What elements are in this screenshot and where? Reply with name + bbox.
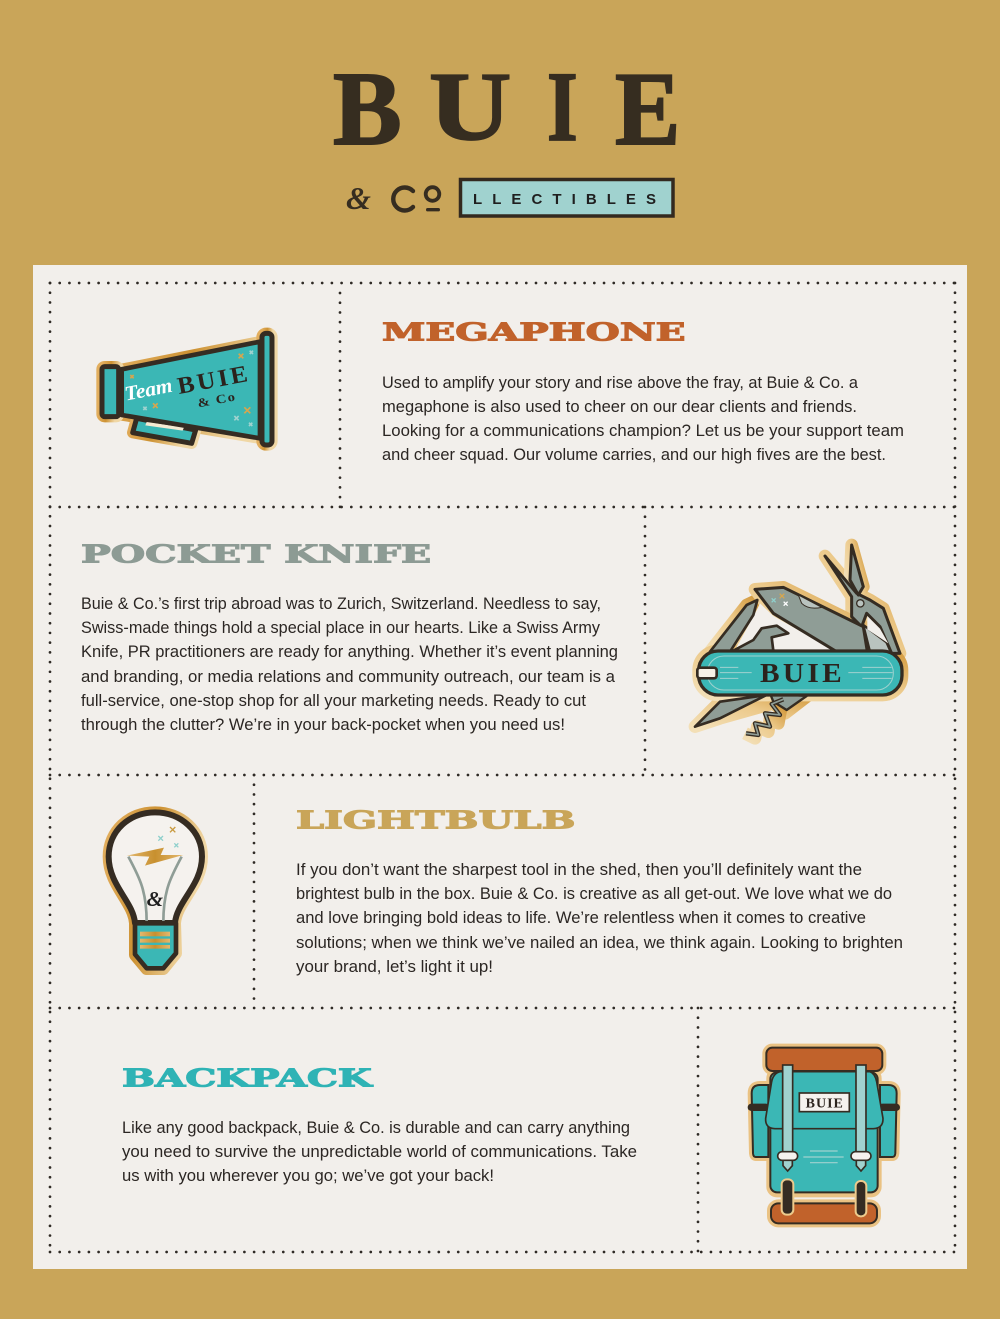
- text: pocket knife: Swiss-made things hold a special place in our hearts. Like a Swiss Army: [81, 618, 601, 637]
- megaphone text: BUIE: [175, 361, 252, 400]
- megaphone text: & Co: [196, 389, 237, 410]
- megaphone text: Team: [122, 373, 174, 405]
- icon: backpack: [748, 1048, 900, 1223]
- text: backpack: you need to survive the unpredictable world of communications. Take: [122, 1142, 637, 1161]
- text: lightbulb: your brand, let’s light it up!: [296, 957, 493, 976]
- megaphone sparkles: [130, 351, 253, 426]
- section: megaphone: [102, 318, 904, 464]
- logo: & Co: [346, 180, 440, 216]
- section: backpack: [122, 1048, 900, 1223]
- text: megaphone: Used to amplify your story and rise above the fray, at Buie & Co. a: [382, 373, 859, 392]
- logo: & Co: &: [346, 180, 371, 216]
- text: pocket knife: [81, 594, 618, 734]
- text: megaphone: megaphone is also used to cheer on our dear clients and friends.: [382, 397, 857, 416]
- logo: Buie & Collectibles: [333, 50, 680, 216]
- text: pocket knife: through the clutter? We’re in your back-pocket when you need us!: [81, 715, 565, 734]
- icon: lightbulb: &: [147, 887, 164, 911]
- text: backpack: us with you wherever you go; we’ve got your back!: [122, 1166, 494, 1185]
- heading: backpack: BACKPACK: [122, 1064, 374, 1092]
- text: pocket knife: and branding, or media relations and community outreach, our team is a: [81, 667, 616, 686]
- icon: pocket knife: [695, 545, 902, 738]
- text: lightbulb: brightest bulb in the box. Buie & Co. is creative as all get-out. We love what we do: [296, 884, 892, 903]
- heading: lightbulb: LIGHTBULB: [296, 806, 575, 834]
- text: backpack: [122, 1118, 637, 1185]
- text: pocket knife: Knife, PR practitioners are ready for anything. Whether it’s event planning: [81, 642, 618, 661]
- dotted grid: [50, 283, 955, 1252]
- heading: pocket knife: POCKET KNIFE: [81, 540, 431, 568]
- wordmark: BUIE: E: [615, 50, 680, 167]
- text: backpack: Like any good backpack, Buie & Co. is durable and can carry anything: [122, 1118, 630, 1137]
- wordmark: BUIE: B: [333, 51, 402, 167]
- icon: megaphone: [102, 333, 272, 445]
- heading: megaphone: MEGAPHONE: [382, 318, 686, 346]
- icon: backpack: BUIE: [806, 1096, 844, 1110]
- logo: Llectibles box: LLECTIBLES: [473, 191, 656, 208]
- wordmark: BUIE: I: [547, 52, 578, 162]
- text: megaphone: [382, 373, 904, 464]
- text: lightbulb: and love bringing bold ideas to life. We’re relentless when it comes to creative: [296, 908, 866, 927]
- text: lightbulb: solutions; when we think we’ve nailed an idea, we think again. Looking to brighten: [296, 933, 903, 952]
- wordmark: BUIE: [333, 50, 680, 167]
- megaphone text: [122, 361, 252, 410]
- text: lightbulb: [296, 860, 903, 976]
- text: pocket knife: Buie & Co.’s first trip abroad was to Zurich, Switzerland. Needless to say,: [81, 594, 601, 613]
- text: megaphone: and cheer squad. Our volume carries, and our high fives are the best.: [382, 445, 886, 464]
- knife gold outline: [695, 545, 902, 738]
- content panel: [33, 265, 967, 1269]
- wordmark: BUIE: U: [429, 53, 511, 160]
- section: pocket knife: [81, 540, 902, 738]
- text: megaphone: Looking for a communications champion? Let us be your support team: [382, 421, 904, 440]
- logo: Llectibles box: [460, 180, 673, 216]
- icon: lightbulb: [109, 812, 202, 969]
- icon: pocket knife: BUIE: [760, 659, 845, 689]
- text: pocket knife: full-service, one-stop shop for all your marketing needs. Ready to cut: [81, 691, 586, 710]
- text: lightbulb: If you don’t want the sharpest tool in the shed, then you’ll definitely want the: [296, 860, 862, 879]
- section: lightbulb: [109, 806, 903, 976]
